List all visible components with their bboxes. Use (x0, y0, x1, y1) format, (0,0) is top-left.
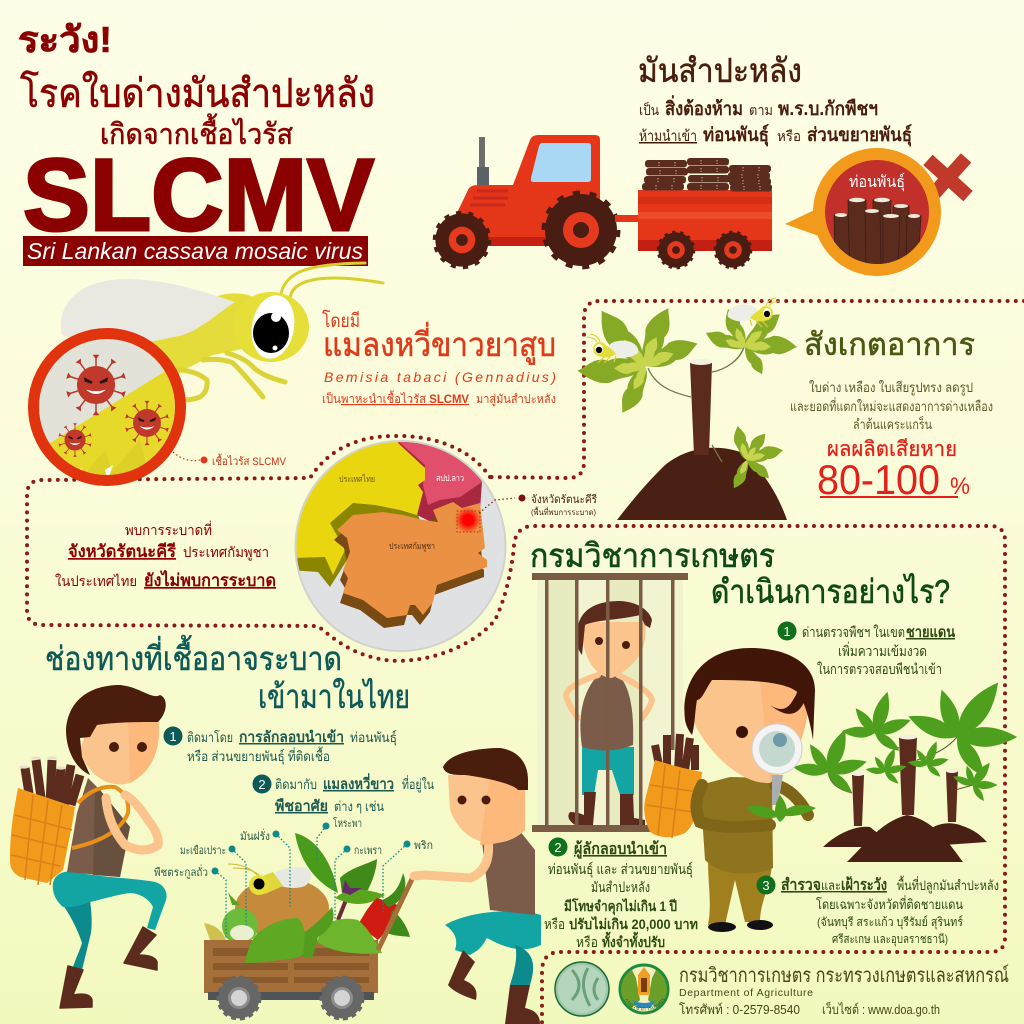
route item 2 (252, 773, 434, 815)
heading: สังเกตอาการ (804, 327, 975, 362)
holy basil leaf top (295, 833, 338, 893)
legs (177, 353, 285, 400)
hitch (615, 215, 640, 222)
title: SLCMV: SLCMV (23, 138, 374, 252)
vest (480, 825, 535, 915)
cassava law text (638, 52, 912, 147)
seal: department emblem (555, 962, 609, 1016)
shoes (708, 920, 773, 932)
item 2 text: หรือ (576, 934, 598, 950)
cell background (537, 580, 683, 825)
twigs (828, 733, 973, 793)
DOA heading (530, 537, 950, 610)
top leaf (831, 684, 920, 770)
stems (852, 737, 958, 826)
outbreak text (55, 521, 276, 590)
virus angry large (66, 355, 126, 415)
wing (61, 279, 235, 345)
item 2 text: ผู้ลักลอบนำเข้า (574, 840, 667, 860)
tractor with trailer (435, 135, 772, 268)
title: beware: ระวัง! (18, 19, 112, 60)
vector description: เป็น (322, 391, 341, 406)
diseased leaf left (577, 303, 701, 418)
eyes (458, 796, 490, 804)
plant labels: โหระพา (333, 816, 362, 830)
footer text: เว็บไซต์ : www.doa.go.th (822, 1000, 940, 1017)
line 2: หรือ (777, 128, 801, 144)
item 2 text: 2 (554, 840, 562, 855)
item 3 text: พื้นที่ปลูกมันสำปะหลัง (897, 875, 999, 894)
description: ใบด่าง เหลือง ใบเสียรูปทรง ลดรูป (809, 379, 973, 396)
line 2: ท่อนพันธุ์ (703, 124, 769, 147)
head and eye (233, 292, 309, 362)
host plants in cart (154, 816, 433, 1019)
virus name banner: Sri Lankan cassava mosaic virus (27, 238, 364, 264)
yield loss label: ผลผลิตเสียหาย (827, 438, 957, 461)
callout: Ratanakiri: (พื้นที่พบการระบาด) (531, 506, 596, 517)
mound (617, 448, 787, 520)
item 1 text: 1 (783, 624, 791, 639)
item 3 text: สำรวจ (781, 876, 821, 894)
legume pod (204, 923, 226, 940)
routes heading: เข้ามาในไทย (258, 678, 410, 715)
diseased leaf low (730, 425, 785, 491)
logs on trailer (642, 158, 772, 192)
sticks (25, 760, 80, 805)
man with basket walking (10, 685, 167, 1008)
item 2 text: มันสำปะหลัง (591, 879, 650, 895)
boots (448, 950, 540, 1024)
boots (568, 792, 645, 825)
line 2 (639, 124, 912, 147)
face (448, 775, 525, 843)
line 1: พ.ร.บ.กักพืชฯ (778, 98, 878, 120)
label: virus: เชื้อไวรัส SLCMV (212, 453, 287, 468)
item 2 text: ท่อนพันธุ์ และ ส่วนขยายพันธุ์ (548, 861, 693, 878)
plant labels (154, 816, 433, 938)
stems (834, 198, 921, 266)
leaf sample (746, 795, 816, 822)
axle (208, 992, 374, 1000)
map label: laos: สปป.ลาว (436, 473, 464, 483)
vest (67, 778, 130, 877)
whitefly on potato (228, 864, 311, 895)
routes heading (45, 635, 410, 715)
route item 1: ติดมาโดย (187, 729, 233, 745)
heading: มันสำปะหลัง (638, 52, 802, 89)
trailer (638, 190, 772, 251)
item 3 text: และ (821, 878, 841, 893)
footer text: Department of Agriculture (679, 987, 813, 999)
laos (397, 440, 482, 523)
outbreak spot (455, 507, 481, 533)
torso (700, 777, 773, 874)
officer with magnifier (644, 648, 816, 932)
jail with smuggler (532, 573, 688, 832)
route item 2: แมลงหวี่ขาว (323, 773, 394, 793)
basket (10, 788, 75, 885)
face (582, 622, 646, 678)
callout: Ratanakiri (479, 493, 597, 517)
thailand shadow (296, 503, 420, 587)
item 2 text: หรือ (544, 916, 565, 932)
face (693, 680, 809, 783)
arm (414, 838, 489, 878)
title block (18, 19, 375, 266)
stem (690, 359, 712, 455)
item 1 text: ชายแดน (906, 624, 956, 641)
eyes (595, 637, 630, 649)
magnifier (752, 724, 802, 805)
back leg (63, 900, 92, 970)
potato (235, 878, 329, 938)
map (290, 440, 597, 651)
cambodia (337, 502, 487, 618)
route item 2: ติดมากับ (275, 777, 317, 792)
tractor wheels (544, 193, 618, 267)
item 3 text: (จันทบุรี สระแก้ว บุรีรัมย์ สุรินทร์ (817, 915, 963, 930)
scientific name: Bemisia tabaci (Gennadius) (324, 369, 556, 385)
eyes (109, 742, 147, 752)
route item 1 (164, 726, 397, 765)
routes heading: ช่องทางที่เชื้ออาจระบาด (45, 635, 342, 677)
speech bubble: planting stems (785, 148, 941, 276)
line 2: ส่วนขยายพันธุ์ (807, 124, 912, 147)
line 1: ตาม (749, 102, 773, 118)
whitefly illustration (30, 263, 383, 490)
callout: Ratanakiri: จังหวัดรัตนะคีรี (531, 493, 597, 506)
diseased leaf right (703, 307, 797, 377)
man pushing cart (414, 748, 541, 1024)
route item 2: ที่อยู่ใน (402, 775, 434, 793)
body (125, 293, 262, 395)
stem (338, 890, 350, 920)
line 1: สิ่งต้องห้าม (665, 95, 743, 120)
route item 1: 1 (169, 729, 177, 744)
healthy cassava plants (784, 676, 1017, 862)
outbreak text: พบการระบาดที่ (125, 521, 212, 538)
small leaf far right (952, 760, 998, 803)
small leaf right (903, 737, 953, 786)
dotted frames (27, 301, 1024, 1024)
face (80, 715, 159, 784)
line 1 (639, 95, 878, 120)
basket strap (72, 787, 128, 848)
arms (566, 675, 652, 718)
small whitefly on left leaf (586, 334, 638, 363)
intro: โดยมี (322, 309, 360, 332)
virus angry small (59, 423, 91, 457)
route item 1: หรือ ส่วนขยายพันธุ์ ที่ติดเชื้อ (187, 746, 330, 765)
exhaust (477, 137, 489, 186)
label: virus (173, 452, 287, 468)
item 2 text: ทั้งจำทั้งปรับ (602, 931, 665, 950)
virus angry medium (125, 401, 169, 445)
description: ลำต้นแคระแกร็น (853, 415, 932, 432)
footer text: โทรศัพท์ : 0-2579-8540 (679, 1002, 800, 1017)
DOA heading: กรมวิชาการเกษตร (530, 537, 775, 574)
hair (577, 601, 652, 655)
hair (66, 685, 166, 775)
seal: ministry emblem: กรมวิชาการเกษตร (624, 998, 665, 1011)
item 3 text: โดยเฉพาะจังหวัดที่ติดชายแดน (816, 895, 963, 912)
route item 1: ท่อนพันธุ์ (350, 729, 397, 746)
front leg (53, 872, 167, 930)
symptoms plant (577, 298, 797, 520)
route item 2: ต่าง ๆ เช่น (334, 799, 384, 814)
footer text (679, 964, 1009, 1017)
item 3 text: เฝ้าระวัง (841, 876, 887, 894)
small whitefly on right leaf (728, 298, 780, 327)
yield loss figure: % (950, 473, 970, 500)
large leaf (905, 676, 1017, 781)
cambodia shadow (334, 512, 484, 628)
symptoms text (790, 327, 993, 503)
route item 2: พืชอาศัย (275, 798, 328, 815)
basket (644, 760, 702, 838)
route item 1: การลักลอบนำเข้า (239, 729, 344, 746)
stem tops (852, 734, 958, 776)
hair (684, 648, 815, 740)
item 1 text (778, 622, 956, 677)
item 3 text: 3 (762, 878, 770, 893)
item 1 text: ด่านตรวจพืชฯ ในเขต (802, 624, 905, 640)
vector description: มาสู่มันสำปะหลัง (476, 392, 556, 407)
item 1 text: เพิ่มความเข้มงวด (838, 642, 927, 659)
line 1: เป็น (639, 101, 659, 118)
item 3 text (756, 875, 999, 947)
map label: cambodia: ประเทศกัมพูชา (389, 541, 435, 552)
basil front leaves (245, 907, 382, 963)
twigs (648, 347, 744, 462)
eggplant (222, 892, 258, 944)
boots (60, 927, 157, 1008)
basket sticks (655, 734, 695, 770)
wheels (218, 977, 260, 1019)
legs (582, 747, 634, 795)
arms (696, 785, 808, 827)
plant labels: มะเขือเปราะ (180, 844, 226, 857)
DOA heading: ดำเนินการอย่างไร? (711, 573, 950, 610)
arm (106, 795, 158, 850)
outbreak text: ประเทศกัมพูชา (183, 544, 269, 561)
title: caused by virus: เกิดจากเชื้อไวรัส (100, 113, 293, 151)
cart box (204, 940, 378, 993)
basil leaf right (340, 859, 377, 894)
seal: ministry emblem (618, 964, 670, 1014)
chili (358, 873, 410, 940)
item 2 text (544, 838, 698, 950)
eye (736, 726, 748, 738)
item 1 text: ในการตรวจสอบพืชนำเข้า (817, 661, 942, 677)
vest (580, 675, 633, 751)
route item 2: 2 (258, 777, 266, 792)
small leaf (861, 744, 911, 793)
yield loss figure: 80-100 (817, 456, 940, 503)
plant labels: พริก (414, 840, 433, 852)
left leaf (784, 722, 874, 809)
stick tops (19, 756, 66, 770)
magnified virus lens (30, 330, 190, 490)
item 2 text: มีโทษจำคุกไม่เกิน 1 ปี (564, 897, 677, 915)
outbreak text: ยังไม่พบการระบาด (144, 570, 276, 590)
map label: thailand: ประเทศไทย (339, 474, 375, 484)
hair (443, 748, 528, 790)
prohibited X mark (923, 153, 973, 203)
item 2 text: ปรับไม่เกิน 20,000 บาท (569, 915, 698, 932)
plant labels: พืชตระกูลถั่ว (154, 864, 208, 879)
mounds (823, 815, 987, 862)
label: ท่อนพันธุ์ (849, 172, 905, 192)
legs (708, 860, 772, 925)
item 3 text: ศรีสะเกษ และอุบลราชธานี) (832, 932, 948, 947)
handle (378, 875, 426, 950)
whitefly text (322, 309, 556, 407)
bars (532, 573, 688, 832)
legs (445, 911, 541, 955)
plant labels: มันฝรั่ง (240, 828, 270, 843)
trailer wheels (658, 232, 694, 268)
thailand (290, 442, 425, 575)
title: disease name: โรคใบด่างมันสำปะหลัง (20, 70, 375, 116)
description (790, 379, 993, 432)
vector description: พาหะนำเชื้อไวรัส SLCMV (341, 390, 469, 406)
tractor body (456, 135, 600, 245)
line 2: ห้ามนำเข้า (639, 128, 697, 145)
outbreak text: จังหวัดรัตนะคีรี (68, 541, 177, 561)
plant labels: กะเพรา (354, 845, 382, 857)
cab window (531, 143, 591, 182)
vector description (322, 390, 556, 407)
outbreak text: ในประเทศไทย (55, 573, 137, 589)
insect name: แมลงหวี่ขาวยาสูบ (323, 322, 556, 365)
antennae (280, 263, 383, 300)
